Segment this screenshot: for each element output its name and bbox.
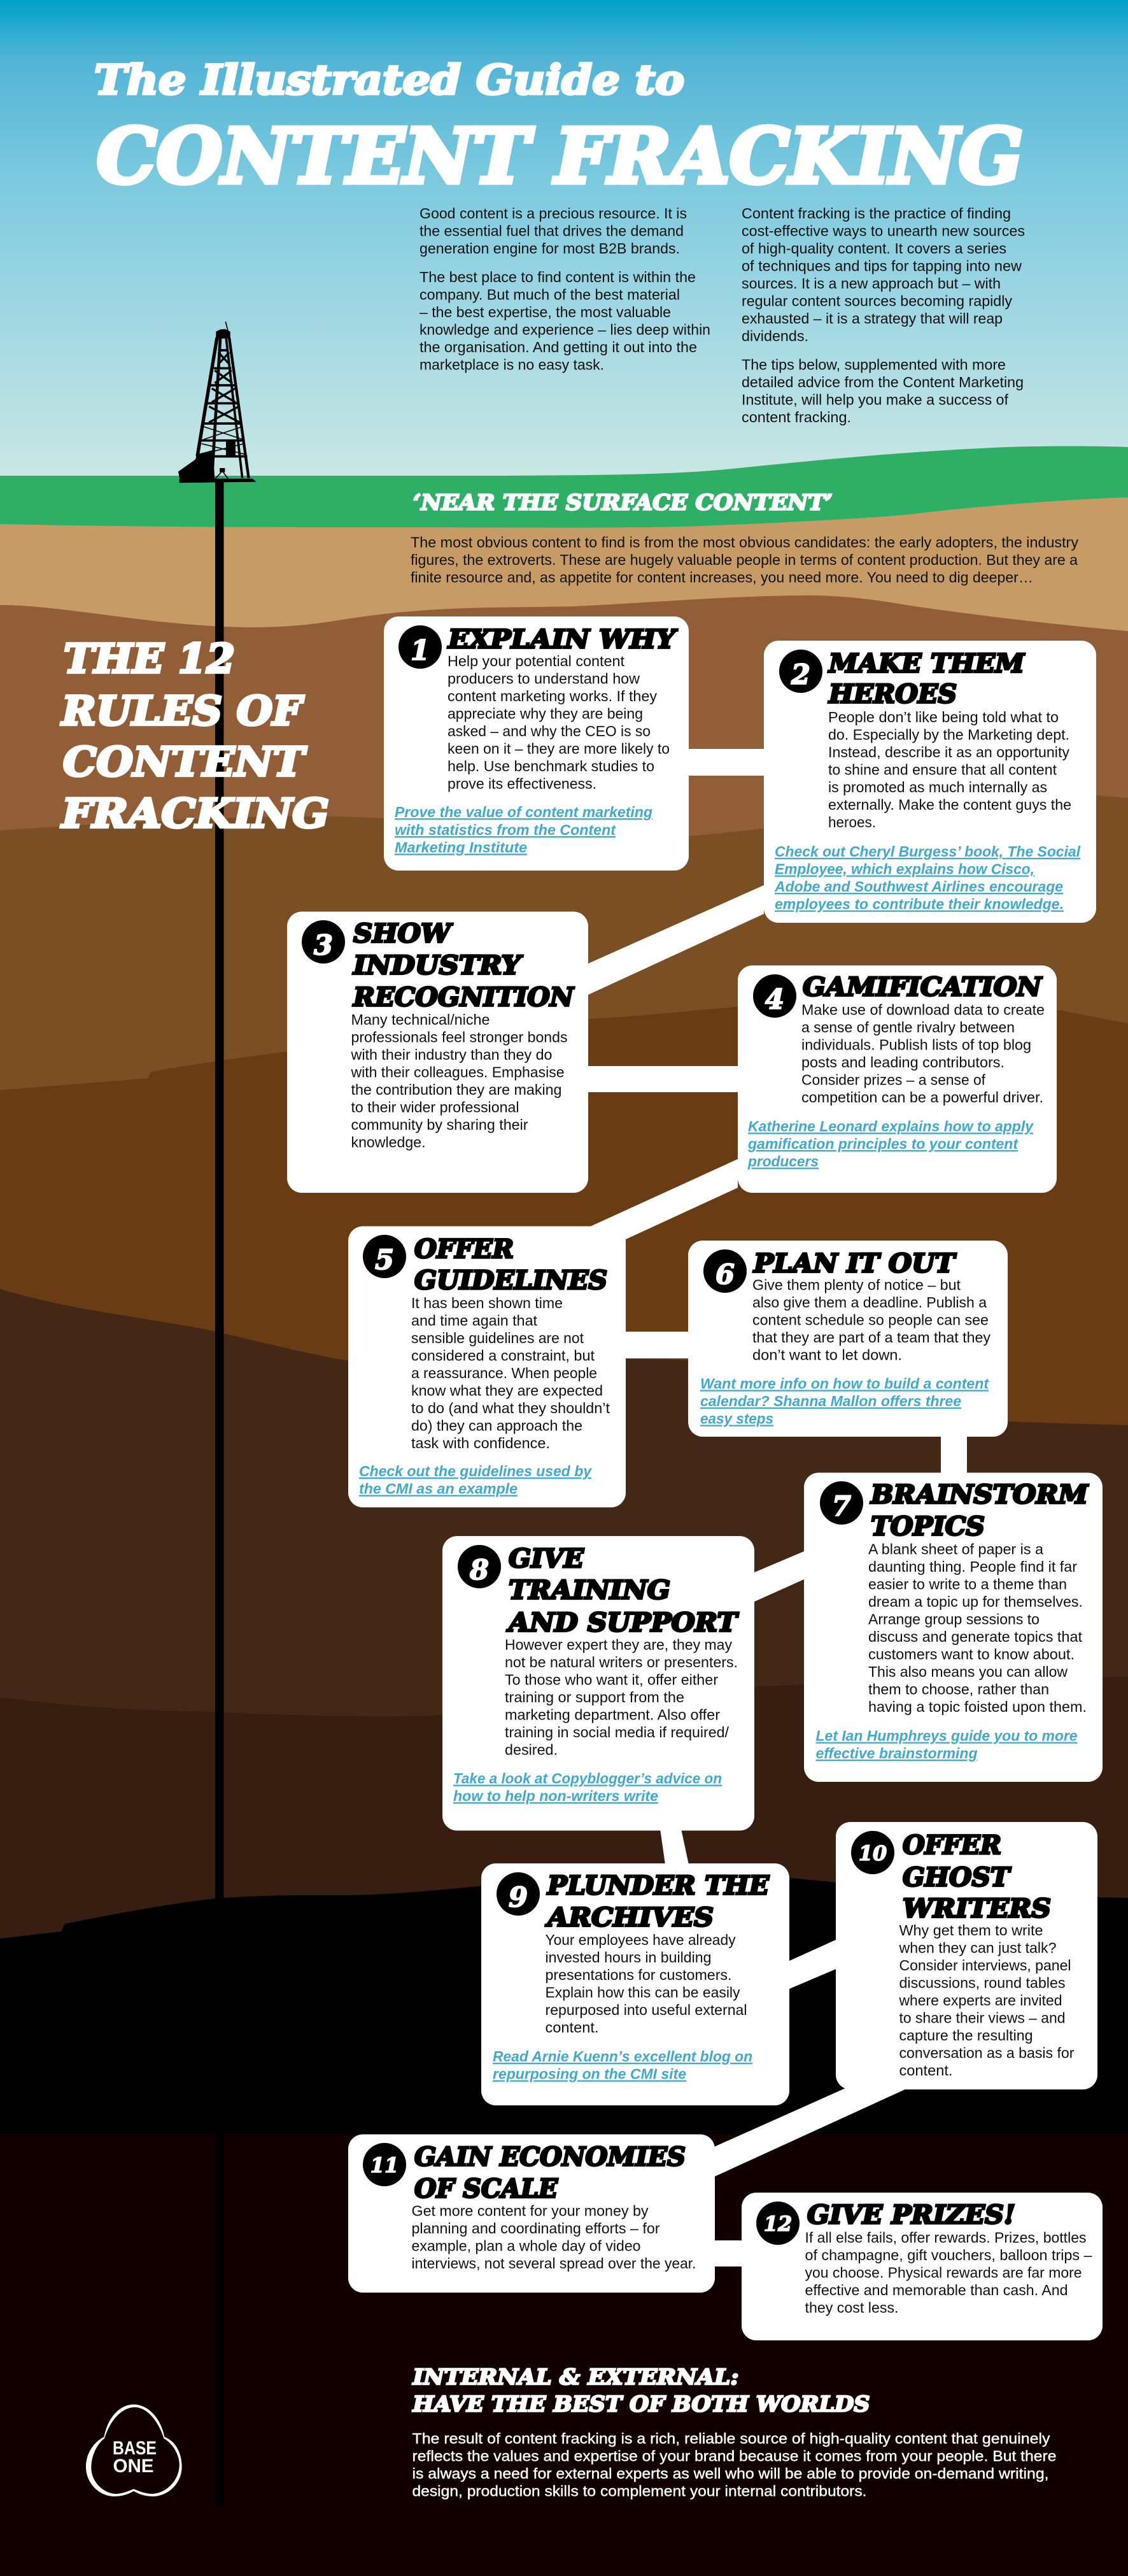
body rule 3: with their industry than they do <box>350 1046 553 1063</box>
body rule 10 <box>898 1922 1075 2079</box>
body rule 3: community by sharing their <box>351 1116 528 1133</box>
link rule 6 <box>700 1376 989 1427</box>
number badge 8 <box>458 1545 501 1588</box>
near surface text block: finite resource and, as appetite for content increases, you need more. You need to dig deeper… <box>411 569 1033 586</box>
heading rule 5 <box>414 1234 607 1295</box>
logo: Base One <box>86 2405 182 2496</box>
body rule 8: not be natural writers or presenters. <box>505 1654 738 1670</box>
heading: internal and external: HAVE THE BEST OF BOTH WORLDS <box>412 2392 870 2417</box>
link rule 1: with statistics from the Content <box>395 822 616 838</box>
near surface text block: The most obvious content to find is from the most obvious candidates: the early adopters, the industry <box>411 534 1078 550</box>
intro text: right column: of techniques and tips for tapping into new <box>742 257 1022 274</box>
body rule 1: help. Use benchmark studies to <box>448 758 654 774</box>
heading rule 3 <box>353 918 574 1013</box>
link rule 2: Check out Cheryl Burgess’ book, The Social <box>775 843 1081 860</box>
number badge 12 <box>756 2202 800 2245</box>
rule 4 panel <box>738 965 1057 1193</box>
heading: the 12 rules: THE 12 <box>64 635 235 682</box>
body rule 5: It has been shown time <box>411 1295 563 1311</box>
conclusion text block: design, production skills to complement your internal contributors. <box>412 2482 867 2499</box>
body rule 10: when they can just talk? <box>898 1940 1057 1956</box>
heading rule 9: ARCHIVES <box>545 1903 714 1932</box>
body rule 4: Consider prizes – a sense of <box>801 1071 986 1088</box>
link rule 4 <box>747 1118 1034 1169</box>
body rule 6: content schedule so people can see <box>752 1312 989 1328</box>
heading rule 2 <box>828 648 1026 709</box>
body rule 3: the contribution they are making <box>351 1081 561 1098</box>
body rule 12 <box>805 2229 1092 2316</box>
number badge 7 <box>820 1481 863 1525</box>
link rule 4: gamification principles to your content <box>747 1135 1019 1152</box>
body rule 1: prove its effectiveness. <box>448 776 596 792</box>
body rule 4 <box>801 1001 1045 1106</box>
heading: internal and external: INTERNAL & EXTERNAL: <box>412 2365 738 2390</box>
body rule 8: However expert they are, they may <box>505 1637 732 1653</box>
body rule 12: they cost less. <box>805 2299 899 2316</box>
intro text: left column: the essential fuel that drives the demand <box>419 223 684 239</box>
body rule 2: to shine and ensure that all content <box>828 762 1057 778</box>
body rule 5: sensible guidelines are not <box>411 1330 584 1346</box>
intro text: right column: The tips below, supplemented with more <box>742 357 1006 373</box>
body rule 1: Help your potential content <box>448 653 625 669</box>
body rule 9: presentations for customers. <box>545 1967 732 1983</box>
heading rule 10 <box>903 1830 1051 1923</box>
body rule 4: a sense of gentle rivalry between <box>801 1019 1015 1035</box>
intro text: right column: regular content sources becoming rapidly <box>742 293 1012 310</box>
body rule 6: Give them plenty of notice – but <box>752 1276 961 1293</box>
heading rule 9: PLUNDER THE <box>547 1871 770 1900</box>
body rule 2: do. Especially by the Marketing dept. <box>828 726 1069 743</box>
heading rule 1: EXPLAIN WHY <box>448 624 678 655</box>
rule 5 panel <box>348 1227 626 1507</box>
link rule 2: employees to contribute their knowledge. <box>775 895 1064 912</box>
heading rule 11 <box>414 2142 686 2203</box>
number badge 1 <box>398 625 442 669</box>
rule 3 panel <box>287 912 588 1193</box>
heading rule 8: AND SUPPORT <box>506 1607 739 1638</box>
body rule 8: To those who want it, offer either <box>505 1671 718 1688</box>
body rule 2: externally. Make the content guys the <box>828 796 1071 813</box>
body rule 7: them to choose, rather than <box>868 1681 1049 1698</box>
body rule 7: discuss and generate topics that <box>868 1628 1083 1645</box>
heading rule 4: GAMIFICATION <box>803 972 1043 1002</box>
link rule 8: how to help non-writers write <box>453 1788 658 1804</box>
link rule 1 <box>395 804 652 856</box>
link rule 7 <box>816 1727 1078 1761</box>
body rule 10: conversation as a basis for <box>899 2044 1075 2061</box>
rule 7 panel <box>804 1472 1103 1782</box>
body rule 12: you choose. Physical rewards are far more <box>805 2265 1082 2281</box>
heading: the 12 rules: RULES OF <box>60 687 304 734</box>
body rule 2 <box>828 709 1071 830</box>
number badge 3 <box>302 920 345 964</box>
heading rule 7: TOPICS <box>871 1512 985 1541</box>
link rule 8 <box>453 1770 722 1804</box>
link rule 7: effective brainstorming <box>816 1745 978 1761</box>
body rule 8: training in social media if required/ <box>505 1724 730 1740</box>
heading rule 10: OFFER <box>903 1830 1001 1860</box>
intro text: left column: the organisation. And getting it out into the <box>419 339 697 355</box>
intro text: left column: knowledge and experience – lies deep within <box>419 321 710 338</box>
near surface text block <box>411 534 1078 586</box>
heading rule 8 <box>506 1544 739 1638</box>
body rule 10: Why get them to write <box>899 1922 1043 1939</box>
body rule 5: and time again that <box>411 1312 538 1328</box>
body rule 4: competition can be a powerful driver. <box>801 1089 1043 1106</box>
heading: the 12 rules <box>60 635 329 837</box>
title: The Illustrated Guide to <box>94 56 684 104</box>
icon: oil derrick <box>178 322 257 483</box>
number badge 10 <box>851 1831 894 1874</box>
well shaft <box>215 481 224 2507</box>
conclusion text block <box>412 2430 1057 2499</box>
heading rule 5: GUIDELINES <box>414 1265 607 1295</box>
rule 2 panel <box>764 641 1096 923</box>
rule 12 panel <box>742 2193 1103 2340</box>
body rule 8: training or support from the <box>505 1689 684 1705</box>
intro text: left column <box>419 205 710 373</box>
conclusion text block: is always a need for external experts as well who will be able to provide on-demand writing, <box>412 2465 1049 2482</box>
body rule 11: example, plan a whole day of video <box>411 2238 640 2254</box>
body rule 6: also give them a deadline. Publish a <box>752 1294 987 1311</box>
heading rule 8: GIVE <box>509 1544 584 1574</box>
body rule 12: If all else fails, offer rewards. Prizes, bottles <box>805 2229 1086 2245</box>
body rule 3: to their wider professional <box>351 1099 519 1116</box>
conclusion text block: The result of content fracking is a rich, reliable source of high-quality content that genuinely <box>412 2430 1050 2447</box>
title <box>94 56 1023 200</box>
heading rule 3: INDUSTRY <box>353 950 523 981</box>
body rule 10: where experts are invited <box>899 1992 1062 2009</box>
heading rule 9 <box>545 1871 770 1932</box>
body rule 6 <box>752 1276 991 1363</box>
body rule 7: Arrange group sessions to <box>868 1611 1040 1628</box>
heading: internal and external <box>412 2365 870 2417</box>
number badge 7: 7 <box>832 1491 851 1523</box>
link rule 8: Take a look at Copyblogger’s advice on <box>453 1770 722 1787</box>
body rule 7: customers want to know about. <box>868 1646 1075 1662</box>
heading rule 3: RECOGNITION <box>353 982 574 1013</box>
number badge 11: 11 <box>370 2153 398 2177</box>
body rule 6: don’t want to let down. <box>752 1346 902 1363</box>
intro text: right column: sources. It is a new approach but – with <box>742 275 1001 292</box>
heading rule 8: TRAINING <box>509 1576 670 1605</box>
body rule 5: know what they are expected <box>411 1382 603 1398</box>
body rule 5: do) they can approach the <box>411 1418 582 1434</box>
body rule 9: content. <box>545 2019 598 2035</box>
body rule 6: that they are part of a team that they <box>752 1329 991 1346</box>
number badge 4: 4 <box>765 984 784 1016</box>
link rule 6: calendar? Shanna Mallon offers three <box>700 1393 961 1409</box>
number badge 9: 9 <box>509 1882 528 1914</box>
body rule 2: is promoted as much internally as <box>828 779 1047 795</box>
intro text: right column: dividends. <box>742 327 808 344</box>
body rule 10: Consider interviews, panel <box>899 1957 1071 1974</box>
intro text: right column: Content fracking is the practice of finding <box>742 205 1011 222</box>
body rule 1 <box>448 653 670 792</box>
rule 11 panel <box>348 2135 715 2293</box>
body rule 3: with their colleagues. Emphasise <box>350 1064 564 1080</box>
number badge 3: 3 <box>314 930 333 962</box>
body rule 2: People don’t like being told what to <box>828 709 1059 725</box>
heading: near the surface content: ‘NEAR THE SURFACE CONTENT’ <box>413 490 833 516</box>
link rule 7: Let Ian Humphreys guide you to more <box>816 1727 1078 1744</box>
intro text: right column: content fracking. <box>742 409 851 425</box>
link rule 6: Want more info on how to build a content <box>700 1376 989 1392</box>
number badge 6 <box>703 1249 747 1293</box>
link rule 9: repurposing on the CMI site <box>493 2066 686 2082</box>
number badge 5 <box>363 1235 406 1278</box>
body rule 9: Explain how this can be easily <box>545 1984 740 2001</box>
heading rule 12: GIVE PRIZES! <box>807 2200 1015 2230</box>
body rule 12: of champagne, gift vouchers, balloon trips – <box>805 2247 1092 2263</box>
body rule 2: Instead, describe it as an opportunity <box>828 744 1069 760</box>
conclusion text block: reflects the values and expertise of your brand because it comes from your people. But there <box>412 2448 1057 2465</box>
body rule 7: This also means you can allow <box>868 1663 1068 1680</box>
body rule 10: to share their views – and <box>899 2010 1066 2026</box>
link rule 6: easy steps <box>700 1410 773 1427</box>
body rule 10: capture the resulting <box>899 2027 1033 2044</box>
intro text: right column: detailed advice from the Content Marketing <box>742 374 1024 390</box>
link rule 2 <box>774 843 1081 912</box>
heading rule 7 <box>870 1480 1089 1541</box>
rule 1 panel <box>384 616 689 871</box>
intro text: left column: marketplace is no easy task. <box>419 357 604 373</box>
heading rule 6: PLAN IT OUT <box>753 1248 957 1279</box>
body rule 11: planning and coordinating efforts – for <box>411 2220 660 2237</box>
body rule 12: effective and memorable than cash. And <box>805 2282 1068 2298</box>
logo: Base One: BASE <box>113 2438 157 2459</box>
heading rule 3: SHOW <box>353 918 453 949</box>
link rule 2: Adobe and Southwest Airlines encourage <box>774 878 1063 895</box>
heading rule 11: GAIN ECONOMIES <box>414 2142 686 2172</box>
number badge 12: 12 <box>764 2212 792 2236</box>
link rule 5: the CMI as an example <box>359 1480 518 1497</box>
heading rule 2: HEROES <box>828 679 957 709</box>
body rule 4: individuals. Publish lists of top blog <box>801 1037 1031 1053</box>
body rule 3: professionals feel stronger bonds <box>351 1029 568 1046</box>
body rule 11: interviews, not several spread over the year. <box>411 2255 696 2272</box>
number badge 5: 5 <box>375 1244 394 1276</box>
body rule 8 <box>505 1637 738 1758</box>
body rule 5 <box>411 1295 610 1451</box>
heading rule 5: OFFER <box>414 1234 514 1264</box>
intro text: left column: Good content is a precious resource. It is <box>419 205 687 222</box>
body rule 5: task with confidence. <box>411 1435 550 1451</box>
link rule 4: producers <box>747 1153 819 1169</box>
body rule 4: posts and leading contributors. <box>801 1054 1005 1071</box>
number badge 6: 6 <box>716 1259 735 1291</box>
intro text: left column: The best place to find content is within the <box>419 269 696 285</box>
number badge 8: 8 <box>469 1555 489 1586</box>
body rule 10: content. <box>899 2062 952 2079</box>
body rule 7: having a topic foisted upon them. <box>868 1698 1087 1715</box>
body rule 1: appreciate why they are being <box>448 706 643 722</box>
heading: the 12 rules: FRACKING <box>60 790 329 837</box>
heading: the 12 rules: CONTENT <box>63 738 307 785</box>
intro text: right column: Institute, will help you make a success of <box>742 391 1009 408</box>
body rule 2: heroes. <box>828 814 876 830</box>
intro text: right column: cost-effective ways to unearth new sources <box>742 223 1025 239</box>
body rule 11: Get more content for your money by <box>411 2202 649 2219</box>
body rule 5: considered a constraint, but <box>411 1348 595 1364</box>
body rule 3: Many technical/niche <box>351 1011 490 1028</box>
number badge 1: 1 <box>411 635 430 667</box>
link rule 1: Prove the value of content marketing <box>395 804 652 820</box>
body rule 7: A blank sheet of paper is a <box>868 1541 1043 1558</box>
link rule 9: Read Arnie Kuenn’s excellent blog on <box>493 2048 752 2065</box>
connectors between rules <box>587 749 967 2266</box>
title: CONTENT FRACKING <box>97 112 1023 200</box>
link rule 5: Check out the guidelines used by <box>359 1463 592 1479</box>
heading rule 10: GHOST <box>903 1862 1012 1893</box>
body rule 9: invested hours in building <box>545 1949 712 1965</box>
rule 10 panel <box>836 1822 1097 2089</box>
body rule 7: dream a topic up for themselves. <box>868 1593 1083 1610</box>
body rule 9 <box>545 1932 747 2035</box>
intro text: right column: exhausted – it is a strategy that will reap <box>742 310 1003 327</box>
rule 6 panel <box>688 1241 1008 1437</box>
body rule 1: asked – and why the CEO is so <box>448 723 651 739</box>
link rule 2: Employee, which explains how Cisco, <box>775 861 1034 878</box>
body rule 3 <box>350 1011 568 1150</box>
body rule 7: daunting thing. People find it far <box>868 1558 1077 1575</box>
body rule 8: desired. <box>505 1741 558 1758</box>
body rule 4: Make use of download data to create <box>801 1001 1045 1018</box>
logo: Base One: ONE <box>113 2456 154 2477</box>
body rule 1: producers to understand how <box>448 670 640 687</box>
rule 8 panel <box>442 1536 754 1830</box>
body rule 7: easier to write to a theme than <box>868 1576 1067 1592</box>
number badge 4 <box>753 974 796 1018</box>
body rule 10: discussions, round tables <box>899 1974 1066 1991</box>
body rule 11 <box>411 2202 696 2272</box>
number badge 2: 2 <box>791 659 810 691</box>
number badge 2 <box>779 650 822 693</box>
number badge 10: 10 <box>859 1841 887 1865</box>
body rule 9: repurposed into useful external <box>545 2002 747 2018</box>
body rule 8: marketing department. Also offer <box>505 1707 720 1723</box>
heading rule 2: MAKE THEM <box>828 648 1026 679</box>
link rule 9 <box>493 2048 752 2082</box>
number badge 11 <box>363 2143 406 2186</box>
rule 9 panel <box>481 1863 789 2105</box>
body rule 1: content marketing works. If they <box>448 688 657 704</box>
intro text: left column: company. But much of the best material <box>419 287 680 303</box>
link rule 1: Marketing Institute <box>395 839 527 856</box>
near surface text block: figures, the extroverts. These are hugely valuable people in terms of content production. But they are a <box>411 551 1078 568</box>
body rule 5: to do (and what they shouldn’t <box>411 1400 610 1416</box>
intro text: left column: generation engine for most B2B brands. <box>419 240 680 257</box>
intro text: right column <box>742 205 1025 425</box>
body rule 9: Your employees have already <box>545 1932 736 1948</box>
heading rule 11: OF SCALE <box>414 2174 558 2203</box>
number badge 9 <box>497 1872 540 1916</box>
link rule 4: Katherine Leonard explains how to apply <box>748 1118 1034 1135</box>
heading rule 7: BRAINSTORM <box>870 1480 1089 1509</box>
body rule 5: a reassurance. When people <box>411 1365 597 1381</box>
body rule 1: keen on it – they are more likely to <box>448 740 670 757</box>
intro text: left column: – the best expertise, the most valuable <box>419 304 671 320</box>
heading rule 10: WRITERS <box>903 1894 1051 1923</box>
body rule 7 <box>868 1541 1087 1715</box>
intro text: right column: of high-quality content. It covers a series <box>742 240 1006 257</box>
link rule 5 <box>359 1463 592 1497</box>
body rule 3: knowledge. <box>351 1134 425 1150</box>
